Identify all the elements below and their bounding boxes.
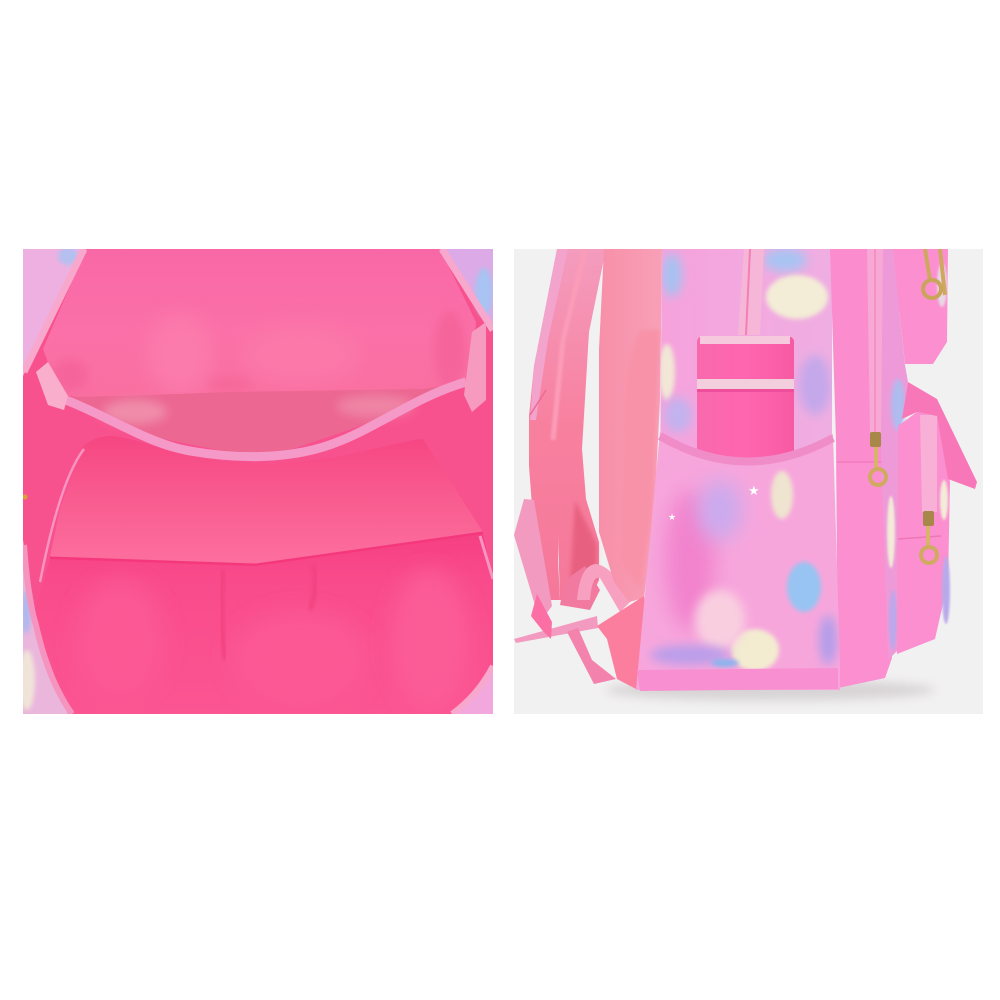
printed strip	[881, 249, 908, 660]
icon: printed stars: ★	[748, 484, 760, 499]
zip binding edges	[24, 249, 84, 372]
main printed body	[660, 249, 832, 450]
ground shadow	[605, 679, 935, 701]
water flask	[697, 336, 794, 460]
padded divider shelf	[50, 436, 483, 564]
lower lining fabric	[33, 534, 493, 714]
panel: backpack interior photo	[19, 247, 493, 714]
upper lining fabric	[43, 249, 476, 402]
icon: top zipper pulls	[923, 249, 945, 298]
corner reinforcement	[597, 596, 644, 689]
pocket binding	[63, 382, 466, 457]
top zipper	[738, 249, 764, 335]
side pocket	[897, 382, 977, 654]
side gusset	[830, 249, 881, 588]
binding loops	[36, 362, 68, 410]
shoulder strap	[514, 249, 632, 684]
icon: main zipper pull	[870, 432, 886, 485]
back padding	[599, 249, 662, 602]
front mesh pocket: ★	[668, 513, 676, 523]
icon: zipper glint	[22, 494, 28, 500]
top side pocket	[893, 249, 948, 364]
outer print corners	[19, 247, 493, 714]
lower zip binding	[24, 545, 72, 714]
mesh pocket	[71, 386, 439, 452]
inner strap	[556, 249, 606, 600]
icon: side zipper pull	[921, 511, 937, 563]
front mesh pocket	[636, 432, 840, 691]
webbing	[514, 499, 552, 622]
panel: backpack side view photo	[514, 248, 983, 714]
main zipper tape	[867, 249, 883, 435]
outer strap	[529, 249, 575, 600]
pocket flap	[902, 382, 977, 489]
